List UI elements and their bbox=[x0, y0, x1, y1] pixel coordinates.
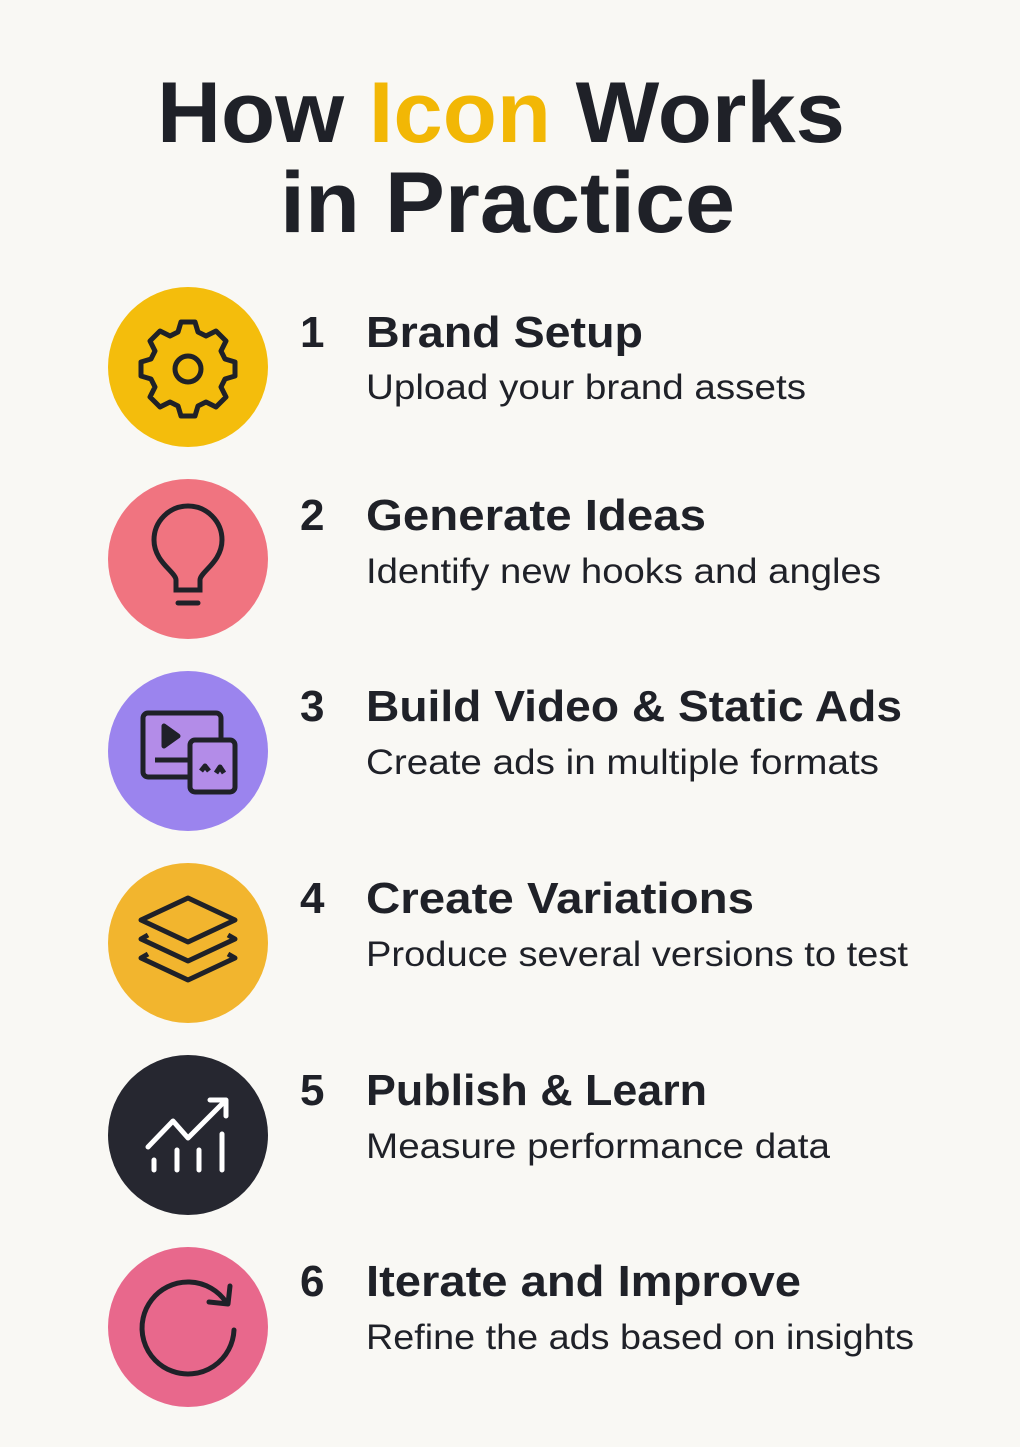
step 6: iterate and improve: Refine the ads based on insights bbox=[366, 1318, 914, 1357]
icon: video and static bbox=[143, 713, 235, 792]
step 5: publish and learn: Publish & Learn bbox=[366, 1066, 707, 1115]
step 2: generate ideas bbox=[108, 479, 881, 639]
step 5: publish and learn: Measure performance data bbox=[366, 1127, 831, 1166]
step 6: iterate and improve: Iterate and Improve bbox=[366, 1257, 801, 1306]
step 2: generate ideas: Identify new hooks and angles bbox=[366, 552, 881, 591]
step 3: build ads: 3 bbox=[300, 682, 324, 731]
step 1: brand setup bbox=[108, 287, 806, 447]
icon: growth chart bbox=[148, 1100, 226, 1170]
step 6: iterate and improve: 6 bbox=[300, 1257, 324, 1306]
step 1: brand setup: Upload your brand assets bbox=[366, 368, 806, 407]
icon: gear bbox=[141, 322, 235, 416]
step 5: publish and learn: 5 bbox=[300, 1066, 324, 1115]
step 6: iterate and improve bbox=[108, 1247, 914, 1407]
icon: refresh bbox=[142, 1282, 234, 1374]
step 2: generate ideas: Generate Ideas bbox=[366, 491, 706, 540]
title bbox=[157, 65, 845, 251]
title: in Practice bbox=[280, 155, 735, 251]
step 3: build ads bbox=[108, 671, 902, 831]
step 4: create variations: Create Variations bbox=[366, 874, 754, 923]
step 4: create variations: Produce several versions to test bbox=[366, 935, 908, 974]
step 5: publish and learn bbox=[108, 1055, 831, 1215]
step 2: generate ideas: 2 bbox=[300, 491, 324, 540]
icon: layers bbox=[141, 898, 235, 980]
step 4: create variations: 4 bbox=[300, 874, 325, 923]
step 1: brand setup: Brand Setup bbox=[366, 308, 643, 357]
icon: light bulb bbox=[154, 506, 222, 603]
step 3: build ads: Create ads in multiple formats bbox=[366, 743, 879, 782]
step 3: build ads: Build Video & Static Ads bbox=[366, 682, 902, 731]
title: How Icon Works bbox=[157, 65, 845, 161]
step 1: brand setup: 1 bbox=[300, 308, 324, 357]
step 4: create variations bbox=[108, 863, 908, 1023]
